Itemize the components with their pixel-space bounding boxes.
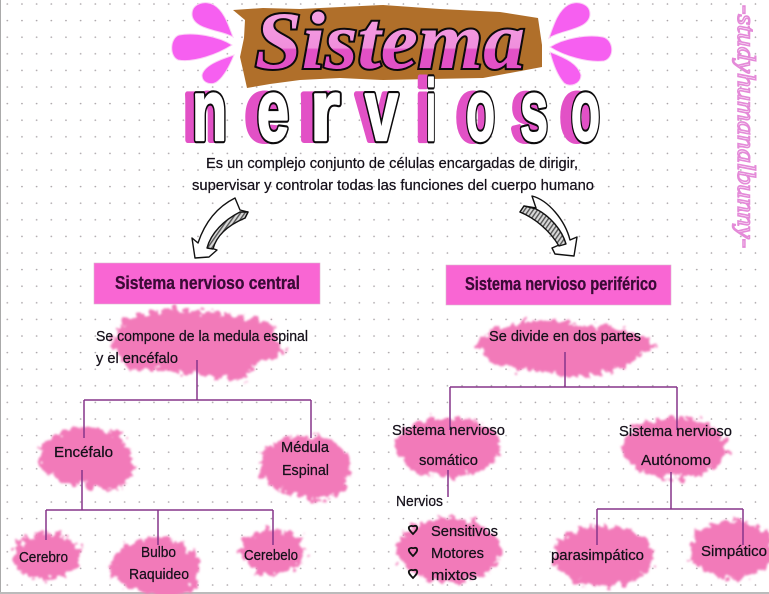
- intro text: [192, 155, 594, 194]
- node: Encéfalo: Encéfalo: [54, 444, 113, 461]
- text: central description: y el encéfalo: [96, 350, 178, 367]
- node: Bulbo Raquídeo: [129, 544, 189, 583]
- title: nervioso: [183, 63, 600, 159]
- title: nervioso: n: [192, 63, 227, 159]
- node: Simpático: Simpático: [701, 543, 767, 560]
- node: Médula Espinal: [281, 439, 330, 479]
- title: nervioso: r: [310, 63, 340, 159]
- title: nervioso: o: [560, 63, 594, 159]
- title: nervioso: s: [520, 63, 548, 159]
- list: nerve types with heart bullets: Sensitivos: [431, 523, 498, 540]
- node: Médula Espinal: Espinal: [282, 462, 329, 479]
- title: nervioso: r: [310, 63, 340, 159]
- title: nervioso: v: [356, 63, 394, 159]
- title: nervioso: i: [426, 63, 436, 159]
- title: nervioso: e: [245, 63, 283, 159]
- node: Cerebelo: Cerebelo: [244, 547, 298, 564]
- node: Sistema nervioso somático: Sistema nervioso: [392, 422, 505, 439]
- title decoration: left petals: [172, 3, 234, 84]
- title: nervioso: o: [571, 63, 600, 159]
- node: Bulbo Raquídeo: Bulbo: [141, 544, 176, 561]
- panel: peripheral heading: Sistema nervioso periférico: [465, 274, 657, 294]
- text: peripheral description: Se divide en dos partes: [489, 328, 641, 345]
- label: Nervios: Nervios: [396, 493, 443, 510]
- text: central description: Se compone de la medula espinal: [96, 328, 308, 345]
- text: central description: [96, 328, 308, 367]
- intro text: Es un complejo conjunto de células encargadas de dirigir,: [206, 155, 578, 172]
- panel: peripheral heading: [446, 265, 671, 305]
- title: nervioso: o: [466, 63, 495, 159]
- node: Médula Espinal: Médula: [281, 439, 330, 456]
- connector lines: [46, 352, 743, 545]
- arrow: to peripheral system: [520, 196, 577, 256]
- title: nervioso: o: [571, 63, 600, 159]
- arrow: to central system: [192, 198, 248, 258]
- node: Parasimpático: parasimpático: [551, 547, 644, 564]
- node: Sistema nervioso Autónomo: [619, 423, 732, 469]
- title: nervioso: s: [511, 63, 541, 159]
- title: nervioso: i: [416, 63, 430, 159]
- title: nervioso: v: [365, 63, 398, 159]
- panel: central heading: [94, 263, 320, 304]
- list: nerve types with heart bullets: Motores: [431, 545, 484, 562]
- title: nervioso: o: [466, 63, 495, 159]
- title: nervioso: n: [192, 63, 227, 159]
- panel: central heading: Sistema nervioso central: [115, 273, 300, 293]
- node: Sistema nervioso Autónomo: Autónomo: [641, 452, 711, 469]
- node: Bulbo Raquídeo: Raquideo: [129, 566, 189, 583]
- blob group: pink watercolor clouds: [13, 308, 769, 594]
- node: Sistema nervioso somático: [392, 422, 505, 469]
- node: Sistema nervioso Autónomo: Sistema nervioso: [619, 423, 732, 440]
- title: nervioso: o: [456, 63, 490, 159]
- node: Sistema nervioso somático: somático: [419, 452, 478, 469]
- title: nervioso: n: [183, 63, 223, 159]
- title: nervioso: s: [520, 63, 548, 159]
- title: nervioso: v: [365, 63, 398, 159]
- list: nerve types with heart bullets: [409, 523, 498, 584]
- title: nervioso: i: [426, 63, 436, 159]
- watermark: vertical handle: -studyhumanalbunny-: [732, 5, 759, 248]
- intro text: supervisar y controlar todas las funciones del cuerpo humano: [192, 177, 594, 194]
- title background: torn brown paper: [233, 5, 542, 88]
- title decoration: right petals: [549, 3, 612, 85]
- title: nervioso: e: [257, 63, 289, 159]
- title: nervioso: r: [298, 63, 332, 159]
- title: nervioso: e: [257, 63, 289, 159]
- list: nerve types with heart bullets: mixtos: [431, 567, 477, 584]
- node: Cerebro: Cerebro: [19, 549, 68, 566]
